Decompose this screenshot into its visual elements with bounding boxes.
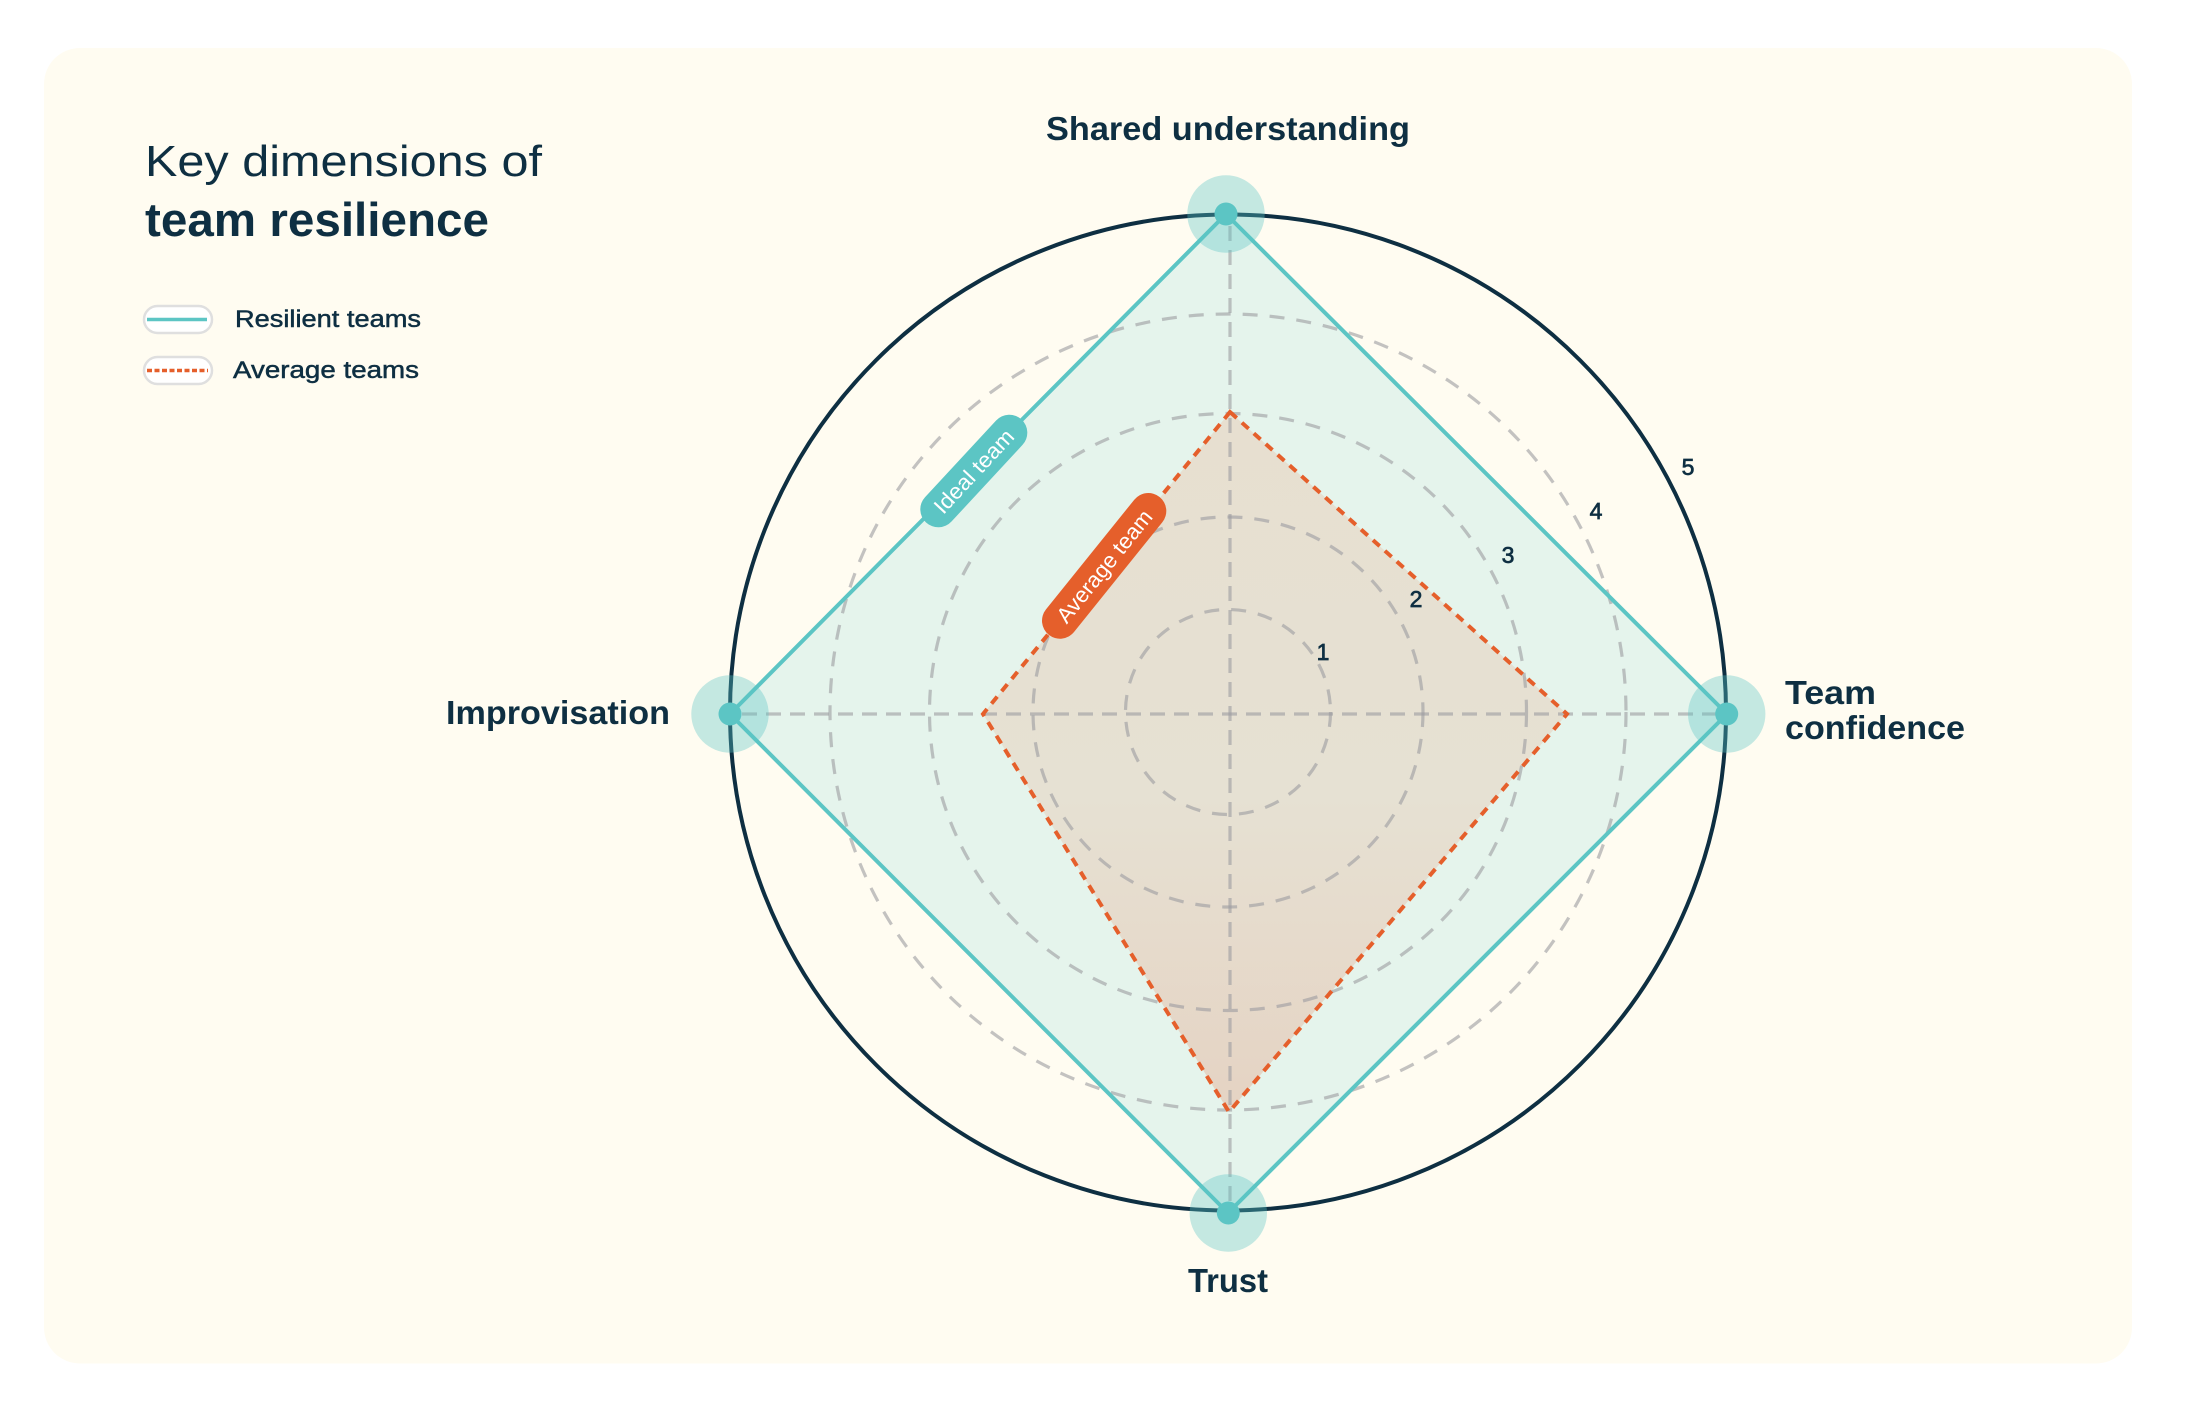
- area: resilient teams: [730, 214, 1727, 1213]
- outline: resilient teams: [730, 214, 1727, 1213]
- scale numbers: 2: [1410, 586, 1422, 612]
- marker: team confidence: [1688, 675, 1765, 753]
- scale numbers: [1317, 454, 1694, 665]
- area: average teams: [983, 412, 1567, 1112]
- legend: [144, 306, 421, 384]
- axis grid lines: [742, 226, 1716, 1204]
- title: Key dimensions of: [145, 137, 543, 186]
- legend item: resilient teams: Resilient teams: [235, 306, 421, 333]
- outer ring: [730, 214, 1726, 1210]
- marker: improvisation: [691, 675, 769, 753]
- legend item: average teams: Average teams: [233, 357, 419, 384]
- badge: average team: Average team: [1051, 505, 1158, 628]
- scale numbers: 5: [1682, 454, 1694, 480]
- title: [145, 137, 543, 246]
- radar chart: [691, 175, 1765, 1252]
- label: team confidence: confidence: [1785, 709, 1965, 746]
- legend item: resilient teams: [144, 306, 421, 333]
- scale numbers: 3: [1502, 542, 1514, 568]
- outline: average teams: [983, 412, 1567, 1112]
- label: shared understanding: Shared understanding: [1046, 110, 1410, 147]
- marker: trust: [1190, 1174, 1267, 1252]
- scale numbers: 1: [1317, 639, 1329, 665]
- scale numbers: 4: [1590, 498, 1603, 524]
- concentric scale rings: [830, 314, 1626, 1110]
- label: improvisation: Improvisation: [446, 694, 670, 731]
- legend item: average teams: [144, 357, 419, 384]
- title: team resilience: [145, 193, 489, 246]
- label: team confidence: [1785, 674, 1965, 746]
- label: trust: Trust: [1188, 1262, 1268, 1299]
- label: team confidence: Team: [1785, 674, 1876, 711]
- marker: shared understanding: [1187, 175, 1265, 253]
- badge: ideal team: Ideal team: [929, 424, 1019, 519]
